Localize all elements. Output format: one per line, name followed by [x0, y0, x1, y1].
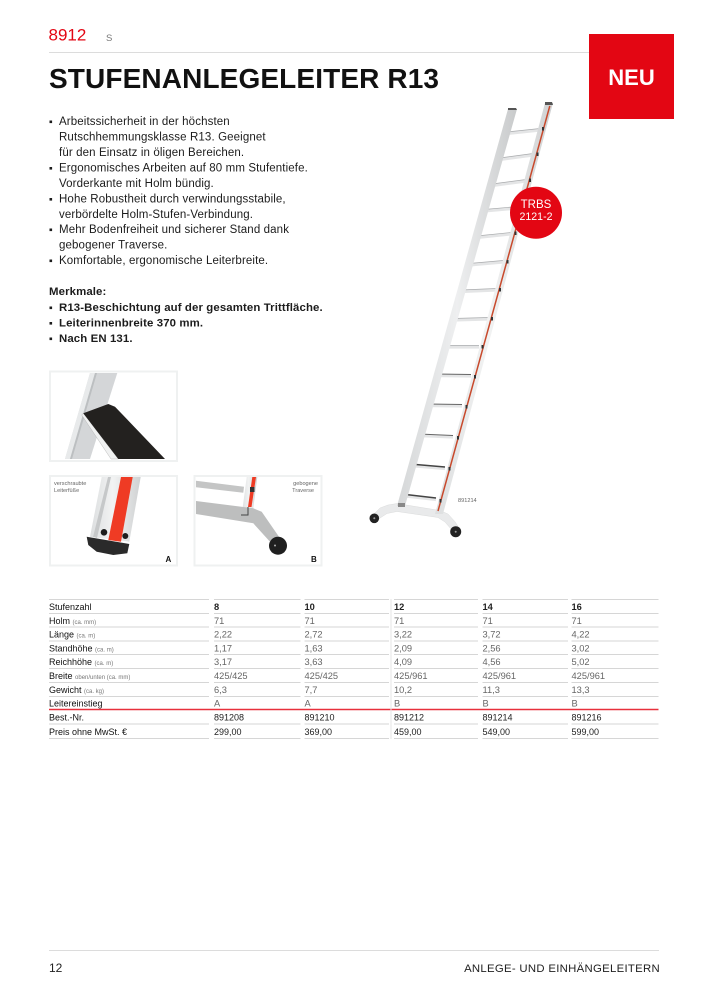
badge: NEU: [589, 34, 674, 119]
text block: product benefits: Komfortable, ergonomische Leiterbreite.: [59, 255, 268, 267]
table column: 12 rungs: 12: [394, 602, 404, 612]
article number label at ladder: 891214: [458, 498, 477, 504]
header: type letter: S: [106, 33, 112, 44]
table column: 12 rungs: 71: [394, 616, 404, 626]
table column: 10 rungs: 3,63: [304, 657, 323, 667]
table column: 8 rungs: 8: [214, 602, 219, 612]
table column: 16 rungs: 16: [572, 602, 582, 612]
text block: features: Merkmale:: [49, 286, 106, 298]
photo panel: coated step detail: [50, 372, 177, 461]
table row labels: Stufenzahl: [49, 602, 92, 612]
table column: 16 rungs: 3,02: [572, 644, 590, 654]
table column: 8 rungs: 1,17: [214, 644, 232, 654]
table column: 16 rungs: 5,02: [572, 657, 590, 667]
table row labels: Reichhöhe (ca. m): [49, 657, 113, 667]
text block: features: Nach EN 131.: [59, 333, 133, 345]
table column: 8 rungs: 3,17: [214, 657, 232, 667]
table column: 12 rungs: 425/961: [394, 671, 428, 681]
text block: product benefits: [50, 116, 308, 267]
table column: 14 rungs: 4,56: [482, 657, 501, 667]
table column: 10 rungs: 71: [304, 616, 315, 626]
badge: NEU: NEU: [608, 65, 655, 90]
table column: 10 rungs: 2,72: [304, 630, 323, 640]
photo panel B: curved crossbar: Traverse: [292, 488, 314, 494]
text block: product benefits: Arbeitssicherheit in der höchsten: [59, 116, 230, 128]
table column: 10 rungs: [304, 602, 338, 737]
title: STUFENANLEGELEITER R13: [49, 63, 439, 94]
table column: 8 rungs: 299,00: [214, 727, 242, 737]
table row labels: Gewicht (ca. kg): [49, 685, 104, 695]
table column: 8 rungs: [214, 602, 248, 737]
table column: 16 rungs: 599,00: [572, 727, 599, 737]
table row labels: Länge (ca. m): [49, 630, 95, 640]
table column: 8 rungs: 6,3: [214, 685, 227, 695]
table row labels: [49, 602, 130, 737]
right rail with red stripe: [435, 102, 553, 514]
table column: 16 rungs: 71: [572, 616, 582, 626]
photo panel A: screwed ladder foot: verschraubte: [54, 481, 86, 487]
text block: product benefits: verbördelte Holm-Stufen-Verbindung.: [59, 209, 253, 221]
table row labels: Leitereinstieg: [49, 698, 103, 708]
footer: section name: ANLEGE- UND EINHÄNGELEITERN: [464, 963, 660, 975]
table column: 8 rungs: 2,22: [214, 630, 232, 640]
table row labels: Best.-Nr.: [49, 712, 84, 722]
table column: 16 rungs: B: [572, 698, 578, 708]
text block: features: R13-Beschichtung auf der gesamten Trittfläche.: [59, 302, 323, 314]
table column: 14 rungs: 3,72: [482, 630, 501, 640]
table column: 16 rungs: 13,3: [572, 685, 590, 695]
table column: 12 rungs: 459,00: [394, 727, 422, 737]
table column: 10 rungs: 425/425: [304, 671, 338, 681]
table row labels: Preis ohne MwSt. €: [49, 727, 127, 737]
text block: product benefits: für den Einsatz in öligen Bereichen.: [59, 147, 244, 159]
table column: 14 rungs: B: [482, 698, 489, 708]
table column: 12 rungs: B: [394, 698, 400, 708]
badge: TRBS 2121-2: TRBS: [521, 199, 552, 211]
table column: 12 rungs: 4,09: [394, 657, 412, 667]
table column: 12 rungs: 10,2: [394, 685, 412, 695]
table row labels: Breite oben/unten (ca. mm): [49, 671, 130, 681]
table column: 16 rungs: 4,22: [572, 630, 590, 640]
table row labels: Standhöhe (ca. m): [49, 644, 114, 654]
table column: 14 rungs: 71: [482, 616, 493, 626]
table column: 12 rungs: [394, 602, 428, 737]
table column: 10 rungs: 369,00: [304, 727, 332, 737]
photo panel A: screwed ladder foot: Leiterfüße: [54, 488, 79, 494]
table column: 10 rungs: 1,63: [304, 644, 323, 654]
text block: product benefits: gebogener Traverse.: [59, 240, 167, 252]
table column: 10 rungs: 7,7: [304, 685, 317, 695]
table column: 14 rungs: 14: [482, 602, 494, 612]
rungs: [402, 128, 540, 500]
table column: 14 rungs: 891214: [482, 712, 513, 722]
badge: TRBS 2121-2: [510, 187, 562, 239]
table row labels: Holm (ca. mm): [49, 616, 96, 626]
table column: 14 rungs: 549,00: [482, 727, 510, 737]
table column: 8 rungs: A: [214, 698, 221, 708]
table column: 16 rungs: 891216: [572, 712, 602, 722]
table column: 8 rungs: 425/425: [214, 671, 248, 681]
table column: 12 rungs: 3,22: [394, 630, 412, 640]
photo panel B: curved crossbar: B: [311, 555, 317, 564]
left rail: [397, 108, 517, 507]
footer: page number: 12: [49, 961, 63, 975]
photo panel A: screwed ladder foot: A: [166, 555, 172, 564]
photo panel B: curved crossbar: [194, 476, 322, 566]
table column: 14 rungs: [482, 602, 516, 737]
table column: 8 rungs: 71: [214, 616, 224, 626]
table column: 10 rungs: 891210: [304, 712, 335, 722]
product image: ladder: [370, 102, 553, 537]
table column: 14 rungs: 425/961: [482, 671, 516, 681]
text block: product benefits: Ergonomisches Arbeiten auf 80 mm Stufentiefe.: [59, 162, 308, 174]
table column: 16 rungs: [572, 602, 605, 737]
table column: 14 rungs: 2,56: [482, 644, 501, 654]
photo panel A: screwed ladder foot: [50, 476, 177, 566]
photo panel B: curved crossbar: gebogene: [293, 481, 318, 487]
table column: 12 rungs: 2,09: [394, 644, 412, 654]
badge: TRBS 2121-2: 2121-2: [520, 211, 552, 223]
header: product number: 8912: [48, 26, 86, 44]
table column: 10 rungs: A: [304, 698, 312, 708]
table column: 16 rungs: 425/961: [572, 671, 605, 681]
table column: 14 rungs: 11,3: [482, 685, 500, 695]
traverse and wheels: [370, 504, 461, 537]
text block: product benefits: Rutschhemmungsklasse R13. Geeignet: [59, 132, 266, 144]
text block: product benefits: Mehr Bodenfreiheit und sicherer Stand dank: [59, 224, 289, 236]
table column: 12 rungs: 891212: [394, 712, 424, 722]
specification table: [49, 599, 658, 739]
text block: product benefits: Vorderkante mit Holm bündig.: [59, 178, 214, 190]
text block: features: [49, 286, 323, 345]
table column: 8 rungs: 891208: [214, 712, 244, 722]
text block: product benefits: Hohe Robustheit durch verwindungsstabile,: [59, 194, 286, 206]
table column: 10 rungs: 10: [304, 602, 315, 612]
text block: features: Leiterinnenbreite 370 mm.: [59, 318, 203, 330]
